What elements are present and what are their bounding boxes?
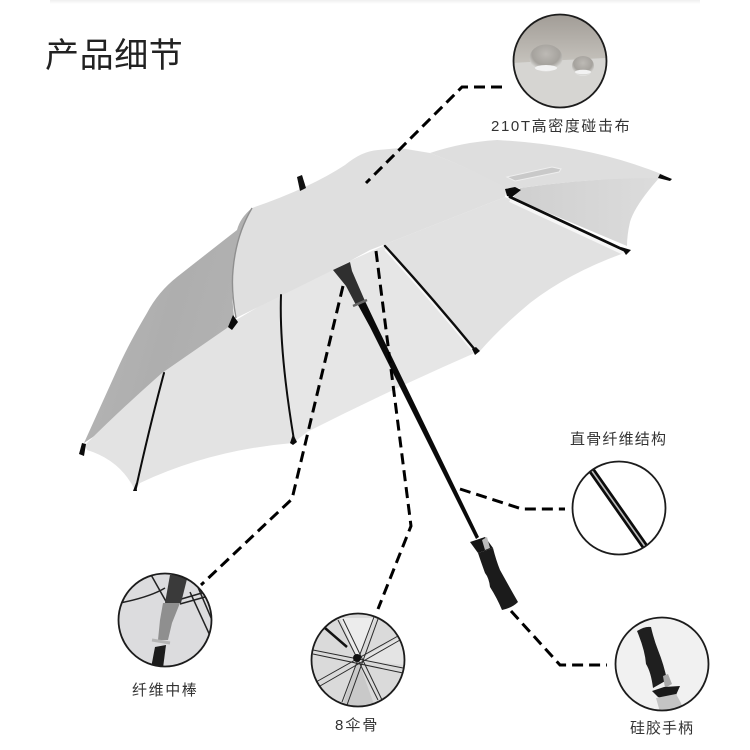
callout: 8 ribs (311, 613, 406, 734)
top spike (297, 175, 306, 191)
canopy panel: lower centre underside (281, 246, 477, 443)
shaft (358, 301, 479, 539)
dashed connector: 8 ribs (376, 251, 411, 609)
icon: handle close-up (616, 617, 711, 712)
rib tips (79, 174, 672, 491)
icon: shaft close-up (118, 573, 213, 668)
callout: straight rib (570, 431, 667, 557)
icon: water droplets (513, 14, 607, 111)
canopy panel: back right (430, 140, 664, 188)
dashed connector: central shaft (201, 286, 343, 585)
callout: central shaft (118, 573, 213, 699)
canopy panel: left shaded (84, 208, 252, 443)
canopy panel: lower right underside (383, 197, 627, 352)
logo patch (507, 167, 561, 181)
icon: rib close-up (590, 469, 648, 548)
label: fabric: 210T高密度碰击布 (491, 118, 631, 135)
label: handle: 硅胶手柄 (630, 720, 694, 737)
label: 8 ribs: 8伞骨 (335, 717, 379, 734)
ribs (136, 197, 626, 488)
dashed connector: handle (511, 611, 607, 665)
fold highlight (232, 208, 252, 318)
canopy panel: top centre (232, 148, 507, 318)
canopy panel: lower left underside (85, 269, 350, 490)
title: 产品细节 (45, 37, 183, 75)
callout: handle (616, 617, 711, 737)
umbrella (79, 140, 672, 610)
top decorative band (50, 0, 700, 4)
label: straight rib: 直骨纤维结构 (570, 431, 667, 448)
label: central shaft: 纤维中棒 (132, 682, 198, 699)
centre hub (333, 262, 365, 305)
rib highlights (386, 200, 626, 354)
icon: ribs from below (311, 613, 406, 708)
canopy panel: right shaded (513, 177, 660, 246)
dashed connector: straight rib (460, 489, 565, 509)
handle collar (470, 537, 493, 553)
handle (478, 548, 518, 610)
dashed connector: fabric (366, 87, 502, 183)
callout: fabric (491, 14, 631, 135)
